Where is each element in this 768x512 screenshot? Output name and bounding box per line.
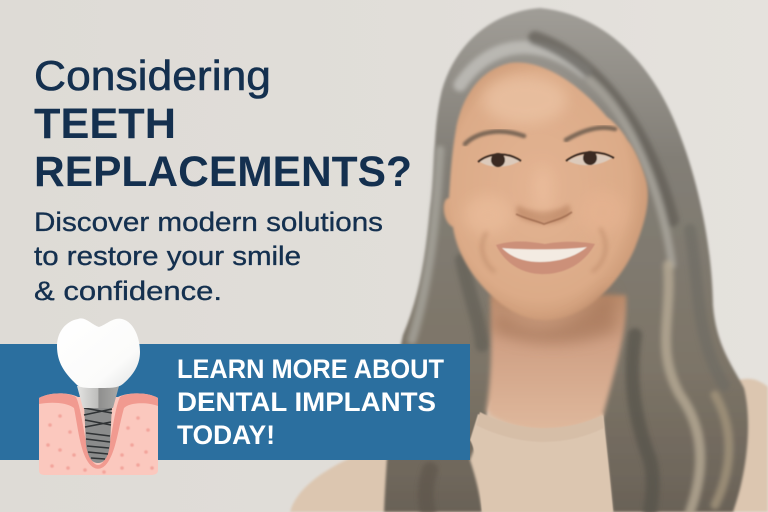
collar xyxy=(476,412,604,442)
sweater shoulders xyxy=(290,379,768,512)
gum top band xyxy=(39,393,158,469)
banner line 1: LEARN MORE ABOUT xyxy=(177,354,444,384)
banner text xyxy=(177,354,444,450)
long hair xyxy=(384,8,748,512)
right eye xyxy=(566,151,614,165)
left cheek glow xyxy=(464,195,512,235)
subheading line 3: & confidence. xyxy=(34,276,222,306)
crown xyxy=(57,318,140,388)
nose shadow xyxy=(516,204,571,224)
banner line 3: TODAY! xyxy=(177,420,275,450)
right cheek glow xyxy=(578,190,626,234)
abutment xyxy=(77,386,119,408)
subheading line 2: to restore your smile xyxy=(34,241,301,271)
portrait: smiling woman with long grey hair xyxy=(290,8,768,512)
icon: dental implant xyxy=(39,318,158,475)
banner line 2: DENTAL IMPLANTS xyxy=(177,387,436,417)
jaw shadow on neck xyxy=(492,288,616,344)
smile xyxy=(496,242,595,274)
screw threads xyxy=(84,408,112,459)
nose base xyxy=(516,212,572,224)
subheading xyxy=(34,207,383,306)
heading line: Considering: Considering xyxy=(34,52,271,99)
implant screw xyxy=(84,404,112,463)
nose highlight xyxy=(534,166,552,214)
subheading line 1: Discover modern solutions xyxy=(34,207,383,237)
forehead highlight xyxy=(483,76,567,124)
neck xyxy=(486,295,626,431)
hair strands xyxy=(412,38,729,512)
left eyebrow xyxy=(465,132,524,144)
gum speckles xyxy=(46,414,154,474)
sweater front xyxy=(470,414,613,512)
heading line: REPLACEMENTS?: REPLACEMENTS? xyxy=(34,148,412,196)
right eyebrow xyxy=(566,128,615,140)
headline xyxy=(34,52,412,196)
smile lines xyxy=(482,228,606,272)
heading line: TEETH: TEETH xyxy=(34,100,176,148)
gum xyxy=(39,393,158,475)
call-to-action banner xyxy=(0,344,470,460)
face xyxy=(444,62,648,320)
left eye xyxy=(478,153,521,167)
